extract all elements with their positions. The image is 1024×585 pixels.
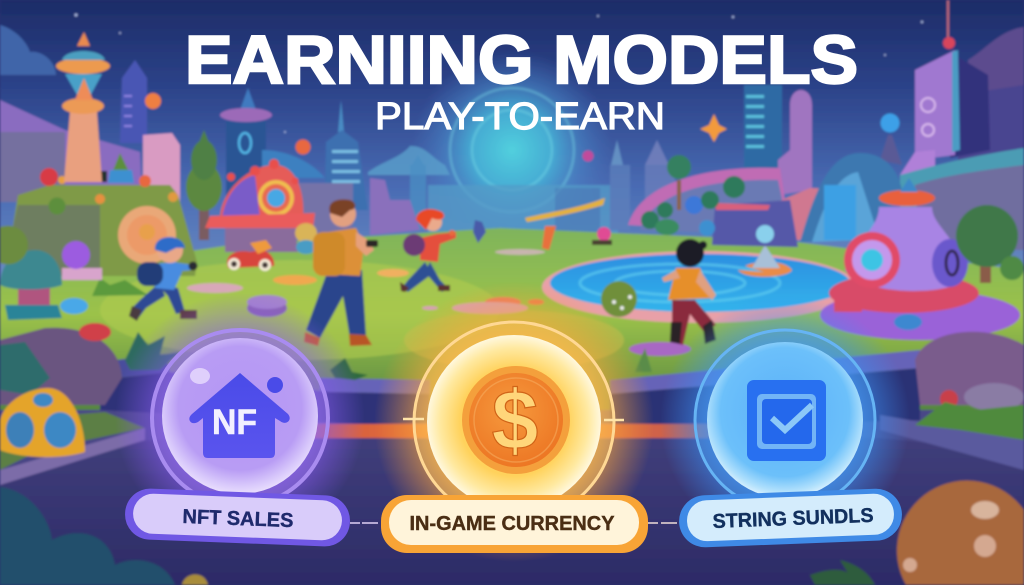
pine tree [186,130,222,240]
girl by pond [662,239,716,345]
portal glow [412,50,612,250]
icon: dollar sign: $ [492,373,538,467]
purple stump [247,295,287,317]
star diamond [700,114,727,142]
orange glow strip [310,424,720,438]
fort top items [40,153,151,187]
floor sweep [0,410,1024,470]
bright grass [100,260,500,360]
ring ticks [403,419,624,420]
bubble [707,342,863,498]
panel: NFT sales [115,293,365,547]
left round bush [0,226,28,264]
bubble [162,338,318,494]
grass tuft mid-left [330,358,368,380]
distant cloud [368,146,450,175]
purple machine [820,178,1020,340]
glow: yellow [374,282,654,562]
icon text: NF: NF [212,403,257,442]
left dark rock [0,328,122,405]
green spotted ball [601,281,637,317]
purple orb [62,241,102,280]
pond [542,251,858,323]
pink ball [582,150,594,162]
icon: house [189,373,290,458]
subtitle: PLAY-TO-EARN [375,96,665,138]
right rocks [915,332,1024,411]
label pill [381,495,648,553]
right dark cloud [968,27,1024,110]
yellow streak [525,198,605,222]
bottom-left teal bushes [0,487,175,585]
right floor wedge [880,415,1024,470]
dark tower [220,88,272,208]
title: EARNIING MODELS [185,22,858,98]
icon: coin [462,366,570,474]
grass [0,228,1024,420]
grey building [295,183,353,238]
tiny far figure [473,220,486,243]
far right tree [956,205,1024,283]
small orange runner [542,226,556,250]
left green patch [0,412,145,470]
right plants [915,402,1024,440]
pink flower creature [592,227,612,245]
boy in blue cap [129,237,198,321]
purple pillar [778,90,812,195]
skyscraper [325,100,368,210]
glow: purple [115,293,365,543]
red hair boy [400,209,456,292]
label text: IN-GAME CURRENCY [410,513,615,535]
bottom right leaves [810,560,875,585]
blue globe [880,114,902,165]
label pill [678,488,903,548]
egg balloon [295,223,317,254]
panel: string sundls [660,295,910,548]
orange ball [145,93,161,109]
cluster of trees [641,155,745,236]
sky [0,0,1024,290]
label pill [124,488,351,547]
ring [695,330,875,510]
mushroom [0,250,62,320]
bubble ring [152,330,328,506]
boy with orange shirt [304,199,378,346]
ring [414,322,614,522]
label text: NFT SALES [182,506,294,532]
distant teal city [410,140,675,238]
stars [74,14,923,133]
pink hill 2 [770,188,870,240]
orange ball 2 [296,140,310,154]
far purple wall [958,85,1024,170]
icon: checkbox [747,380,826,461]
pond boat [738,245,792,277]
left ferns [0,342,50,395]
left cloud [0,25,56,75]
green fort block [12,185,197,276]
connector: purple to orange [350,522,381,524]
blue yellow ball [0,388,85,457]
toy car [227,240,274,271]
ground yellow glow [404,310,624,370]
blue dome [800,153,902,242]
pink hill [628,168,790,235]
red machine [205,159,315,252]
label text: STRING SUNDLS [712,505,874,533]
grass discs [187,249,691,356]
brown spotted ball [897,481,1024,585]
glow: blue [660,295,910,545]
yellow leaf [182,574,208,585]
blue arc [262,150,325,178]
blue tower [120,60,147,143]
small hut [712,200,798,247]
left purple buildings [0,100,142,200]
right tall blue tower [744,85,782,170]
connector: orange to blue [648,522,679,524]
wall [100,350,920,430]
pink block building [143,133,180,210]
blue pebble [60,298,88,314]
bubble [427,335,601,509]
salmon lighthouse [56,32,110,182]
red pink pebble [79,323,111,341]
grass bush left [92,278,148,296]
highlight [190,368,210,384]
floor [0,410,1024,585]
small purple houses [370,178,420,235]
teal hill [900,148,1024,240]
grass tuft centre [635,348,652,372]
right tower [900,0,990,175]
panel: in-game currency [374,282,654,562]
